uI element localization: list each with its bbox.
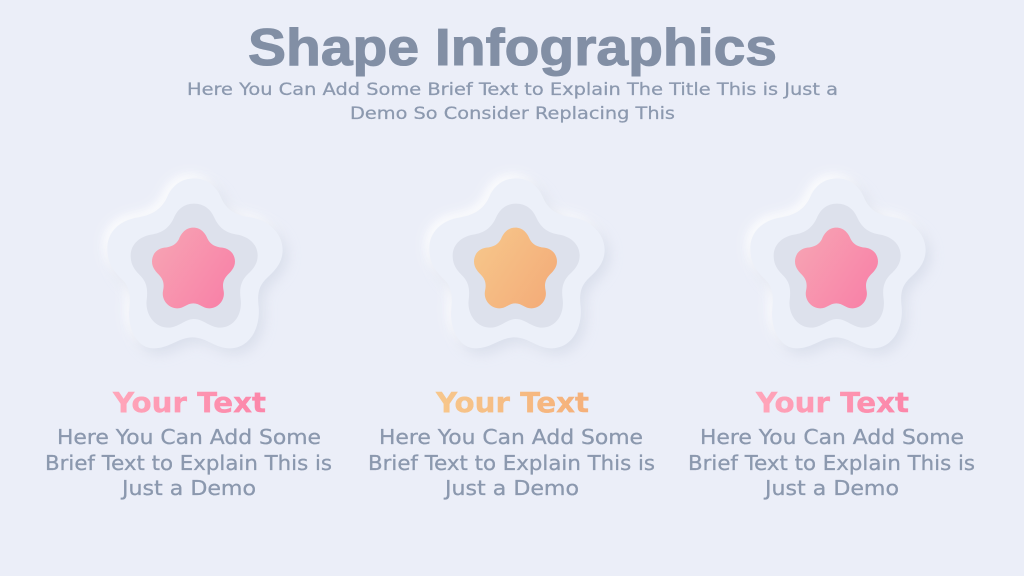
text block: Brief Text to Explain This is [45,451,332,475]
panel: column two [368,174,655,500]
heading: Your Text [112,386,266,419]
heading: Your Text [435,386,589,419]
subtitle [187,80,838,124]
icon: pink star [103,174,287,354]
text block: Here You Can Add Some [57,425,321,449]
heading: Your Text [755,386,909,419]
panel: column three [688,174,975,500]
text block: Brief Text to Explain This is [368,451,655,475]
icon: orange star [425,174,609,354]
text block: Here You Can Add Some [379,425,643,449]
text block: Just a Demo [120,476,256,500]
icon: pink star [746,174,930,354]
subtitle: Here You Can Add Some Brief Text to Explain The Title This is Just a [187,80,838,100]
text block: Just a Demo [443,476,579,500]
text block [45,425,332,500]
text block: Brief Text to Explain This is [688,451,975,475]
text block [688,425,975,500]
text block: Just a Demo [763,476,899,500]
text block [368,425,655,500]
panel: column one [45,174,332,500]
title: Shape Infographics [248,19,777,77]
text block: Here You Can Add Some [700,425,964,449]
subtitle: Demo So Consider Replacing This [350,104,675,124]
